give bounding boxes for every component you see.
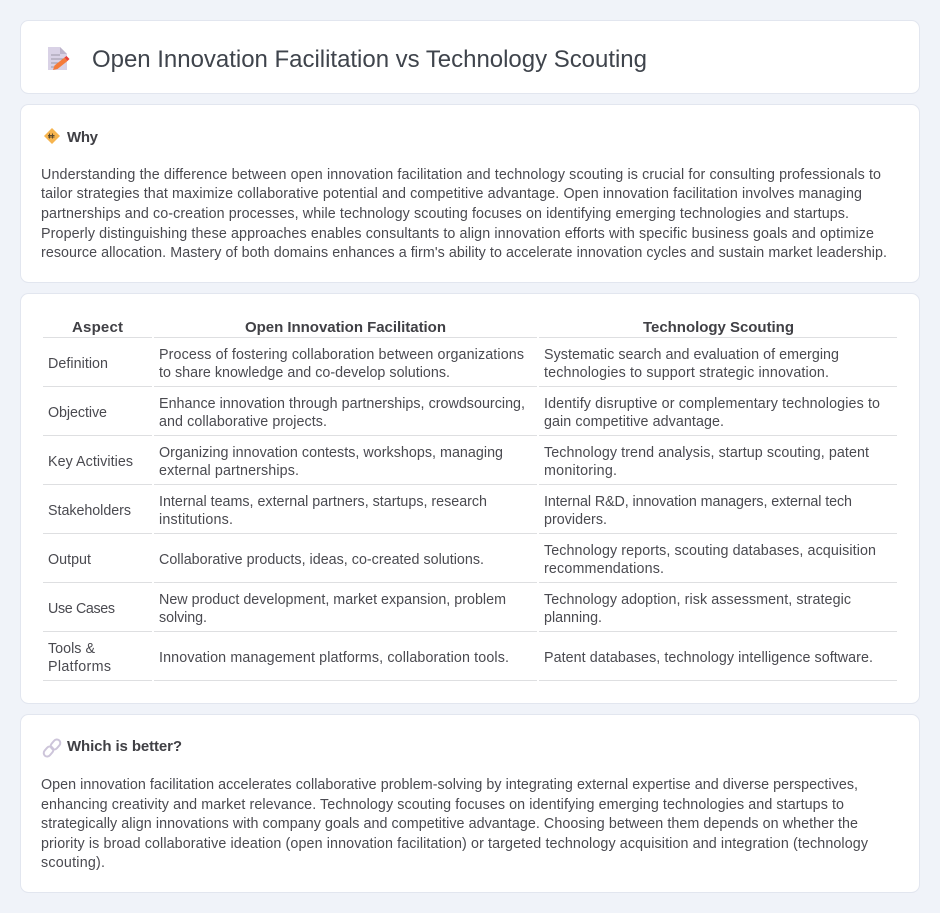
row: use cases: planning. bbox=[544, 610, 602, 626]
row: definition: technologies to support strategic innovation. bbox=[544, 365, 829, 381]
text block: which is better: priority is broad collaborative ideation (open innovation facilitation) or targeted technology acquisition and integration (technology bbox=[41, 836, 869, 852]
panel: why bbox=[20, 104, 920, 282]
row: definition bbox=[48, 347, 839, 381]
row: definition: to share knowledge and co-develop solutions. bbox=[159, 365, 450, 381]
row: key activities: Technology trend analysis, startup scouting, patent bbox=[544, 445, 869, 461]
row: use cases: Use Cases bbox=[48, 601, 115, 617]
text block: which is better: strategically align innovations with company goals and competitive advantage. Choosing between them depends on whether the bbox=[41, 816, 858, 832]
row: key activities: Organizing innovation contests, workshops, managing bbox=[159, 445, 503, 461]
text block: why: tailor strategies that maximize collaborative potential and competitive advantage. Open innovation facilitation involves managing bbox=[41, 186, 862, 202]
row: objective: Enhance innovation through partnerships, crowdsourcing, bbox=[159, 396, 525, 412]
text block: why bbox=[41, 167, 887, 261]
panel: which is better bbox=[20, 714, 920, 892]
row: stakeholders: Stakeholders bbox=[48, 503, 131, 519]
icon: warning diamond bbox=[44, 128, 60, 144]
row: use cases: Technology adoption, risk assessment, strategic bbox=[544, 592, 851, 608]
row: stakeholders: Internal teams, external partners, startups, research bbox=[159, 494, 487, 510]
text block: which is better: Open innovation facilitation accelerates collaborative problem-solving by integrating external expertise and diverse perspectives, bbox=[41, 777, 858, 793]
text block: why: partnerships and co-creation processes, while technology scouting focuses on identifying emerging technologies and startups. bbox=[41, 206, 849, 222]
row: use cases bbox=[48, 592, 851, 626]
table header row: Open Innovation Facilitation bbox=[245, 319, 446, 336]
row: output bbox=[48, 543, 876, 577]
row: output: recommendations. bbox=[544, 561, 664, 577]
row: definition: Systematic search and evaluation of emerging bbox=[544, 347, 839, 363]
icon: chain link bbox=[42, 738, 62, 758]
icon: memo with pencil bbox=[48, 47, 70, 70]
row: output: Collaborative products, ideas, co-created solutions. bbox=[159, 552, 484, 568]
text block: why: Properly distinguishing these approaches enables consultants to align innovation efforts with specific business goals and optimize bbox=[41, 226, 874, 242]
row: definition: Process of fostering collaboration between organizations bbox=[159, 347, 524, 363]
row: output: Technology reports, scouting databases, acquisition bbox=[544, 543, 876, 559]
row: stakeholders: providers. bbox=[544, 512, 607, 528]
text block: which is better: scouting). bbox=[41, 855, 105, 871]
row: use cases: solving. bbox=[159, 610, 207, 626]
text block: why: resource allocation. Mastery of both domains enhances a firm's ability to accelerate innovation cycles and sustain market leadership. bbox=[41, 245, 887, 261]
text block: which is better: enhancing creativity and market relevance. Technology scouting focuses on identifying emerging technologies and startups to bbox=[41, 797, 844, 813]
title: Open Innovation Facilitation vs Technology Scouting bbox=[92, 46, 647, 73]
row: key activities: external partnerships. bbox=[159, 463, 299, 479]
row: stakeholders: Internal R&D, innovation managers, external tech bbox=[544, 494, 852, 510]
panel: title header bbox=[20, 20, 920, 94]
table header row: Technology Scouting bbox=[643, 319, 794, 336]
row: tools and platforms: Tools & bbox=[48, 641, 95, 657]
row: output: Output bbox=[48, 552, 91, 568]
row: key activities bbox=[48, 445, 869, 479]
panel: comparison table bbox=[20, 294, 920, 704]
row: objective bbox=[48, 396, 880, 430]
row: objective: and collaborative projects. bbox=[159, 414, 327, 430]
row: definition: Definition bbox=[48, 356, 108, 372]
table header row: Aspect bbox=[72, 319, 123, 336]
heading: why: Why bbox=[67, 129, 99, 146]
row: tools and platforms: Patent databases, technology intelligence software. bbox=[544, 650, 873, 666]
row: use cases: New product development, market expansion, problem bbox=[159, 592, 506, 608]
row: tools and platforms bbox=[48, 641, 873, 675]
row: key activities: monitoring. bbox=[544, 463, 617, 479]
text block: which is better bbox=[41, 777, 869, 871]
row: objective: Objective bbox=[48, 405, 107, 421]
heading: which is better: Which is better? bbox=[67, 738, 182, 755]
table header row bbox=[72, 319, 794, 336]
row: stakeholders: institutions. bbox=[159, 512, 233, 528]
row: objective: Identify disruptive or complementary technologies to bbox=[544, 396, 880, 412]
row: tools and platforms: Platforms bbox=[48, 659, 111, 675]
text block: why: Understanding the difference between open innovation facilitation and technology scouting is crucial for consulting professionals to bbox=[41, 167, 881, 183]
row: objective: gain competitive advantage. bbox=[544, 414, 724, 430]
row: tools and platforms: Innovation management platforms, collaboration tools. bbox=[159, 650, 509, 666]
row: stakeholders bbox=[48, 494, 852, 528]
row: key activities: Key Activities bbox=[48, 454, 133, 470]
